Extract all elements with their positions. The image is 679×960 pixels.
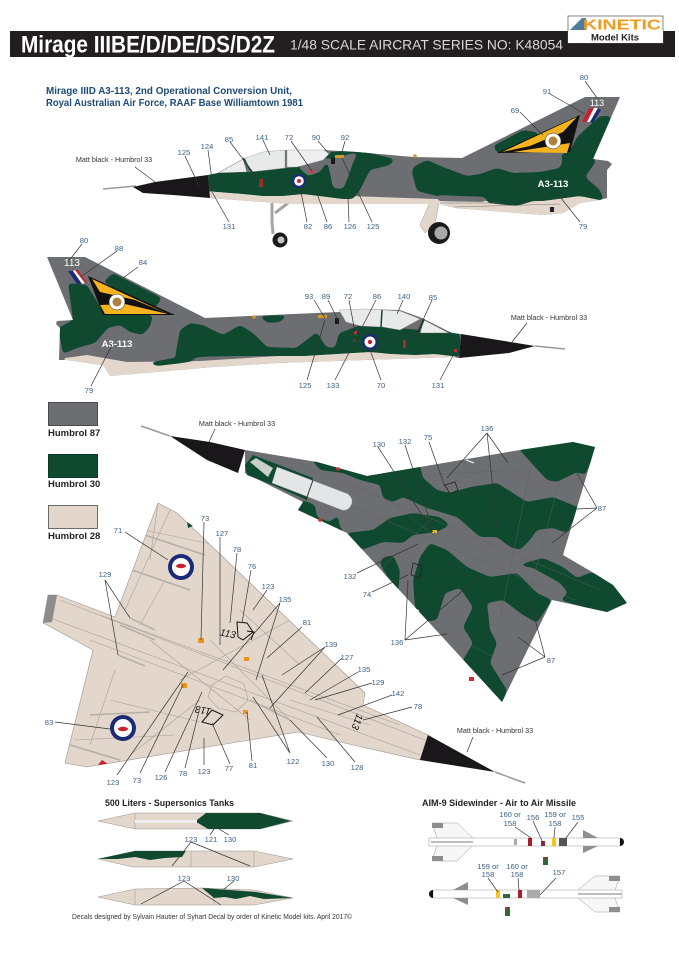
callouts: underside view: 123	[262, 582, 274, 591]
fin flash badge	[88, 276, 175, 315]
callouts: side profile 1: 86	[324, 222, 332, 231]
black nose	[420, 735, 495, 772]
nose gear	[272, 203, 288, 248]
callouts: underside view: 139	[325, 640, 337, 649]
callouts: side profile 2: 72	[344, 292, 352, 301]
callouts: side profile 2: 125	[299, 381, 311, 390]
missile 2 callouts: 158	[511, 870, 523, 879]
roundel	[292, 174, 306, 188]
tail flag	[582, 108, 601, 123]
callouts: side profile 2: 93	[305, 292, 313, 301]
callouts: underside view: 78	[233, 545, 241, 554]
logo: Kinetic Model Kits: Model Kits	[591, 32, 639, 44]
black nose	[170, 436, 245, 473]
callouts: underside view: 135	[279, 595, 291, 604]
logo: Kinetic Model Kits	[568, 16, 663, 44]
aircraft: underside view	[43, 503, 525, 783]
tank callouts: 130	[227, 874, 239, 883]
markings	[538, 98, 604, 190]
missile 1 callouts	[499, 810, 584, 843]
gray base	[208, 97, 620, 215]
black nose	[133, 175, 210, 198]
aircraft: left side profile	[103, 97, 620, 248]
decal details	[318, 467, 474, 681]
green camouflage	[205, 116, 612, 206]
markings: 113	[64, 258, 80, 269]
gear doors	[202, 622, 254, 725]
callouts: side profile 1: 124	[201, 142, 213, 151]
green camouflage	[58, 273, 460, 366]
exhaust	[43, 595, 57, 623]
swatch: Humbrol 28	[48, 506, 100, 542]
callouts: top view: 132	[344, 572, 356, 581]
callouts: underside view: 71	[114, 526, 122, 535]
icon: main wheel	[428, 222, 450, 244]
callouts: underside view: 126	[155, 773, 167, 782]
serial marks: 113	[194, 703, 212, 716]
callouts: top view: 130	[373, 440, 385, 449]
callouts: side profile 1: 125	[178, 148, 190, 157]
callouts: underside view: Matt black - Humbrol 33	[457, 726, 533, 735]
black nose	[459, 334, 535, 358]
tank pylon marks	[187, 522, 193, 528]
swatch: Humbrol 87	[48, 402, 100, 439]
main gear strut	[420, 202, 439, 233]
missile 1 callouts: 158	[549, 819, 561, 828]
callouts: side profile 2: 85	[429, 293, 437, 302]
tank callouts: 123	[178, 874, 190, 883]
callouts: underside view: 130	[322, 759, 334, 768]
heading: missiles: AIM-9 Sidewinder - Air to Air Missile	[422, 798, 576, 809]
markings: A3-113	[102, 339, 132, 350]
tank callouts	[141, 829, 250, 905]
subtitle: 1/48 SCALE AIRCRAT SERIES NO: K48054	[290, 36, 563, 52]
roundel: lower	[110, 715, 136, 741]
callouts: side profile 2: 140	[398, 292, 410, 301]
tank 2	[98, 849, 293, 867]
heading: tanks: 500 Liters - Supersonics Tanks	[105, 798, 234, 809]
scheme heading: Royal Australian Air Force, RAAF Base Williamtown 1981	[46, 98, 303, 109]
small decals	[252, 315, 457, 352]
markings: A3-113	[538, 179, 568, 190]
missile 2	[429, 876, 622, 916]
callouts: top view	[199, 419, 606, 675]
canopy	[339, 309, 449, 335]
decal spots	[181, 638, 249, 714]
callouts: side profile 1: 131	[223, 222, 235, 231]
callouts: side profile 1: 82	[304, 222, 312, 231]
swatch: Humbrol 28: Humbrol 28	[48, 531, 100, 542]
missile 1 callouts: 156	[527, 813, 539, 822]
missile 2 callouts: 158	[482, 870, 494, 879]
tank callouts: 130	[224, 835, 236, 844]
callouts: underside view: 83	[45, 718, 53, 727]
small decals	[259, 154, 560, 212]
panel lines	[50, 503, 425, 755]
serial marks	[194, 627, 364, 731]
callouts: underside view: 73	[133, 776, 141, 785]
callouts: side profile 2: Matt black - Humbrol 33	[511, 313, 587, 322]
callouts: top view: 136	[391, 638, 403, 647]
callouts: underside view: 135	[358, 665, 370, 674]
missile 1 callouts: 155	[572, 813, 584, 822]
callouts: underside view: 122	[287, 757, 299, 766]
callouts: side profile 1	[76, 73, 597, 231]
callouts: underside view: 77	[225, 764, 233, 773]
callouts: side profile 1: 141	[256, 133, 268, 142]
tank callouts: 121	[205, 835, 217, 844]
callouts: side profile 2: 86	[373, 292, 381, 301]
callouts: side profile 2: 80	[80, 236, 88, 245]
swatch: Humbrol 30	[48, 454, 100, 490]
canopy	[218, 150, 330, 173]
callouts: underside view: 127	[341, 653, 353, 662]
fin flash badge	[497, 115, 580, 153]
callouts: top view: 136	[481, 424, 493, 433]
missile 1 callouts: 158	[504, 819, 516, 828]
aircraft: right side profile	[47, 257, 565, 380]
callouts: side profile 1: 69	[511, 106, 519, 115]
green camouflage	[295, 440, 628, 705]
title bar	[10, 31, 675, 58]
callouts: side profile 1: 126	[344, 222, 356, 231]
callouts: side profile 2	[68, 236, 587, 395]
beige underside	[64, 352, 456, 376]
callouts: underside view: 142	[392, 689, 404, 698]
callouts: underside view: 78	[179, 769, 187, 778]
tank 3	[98, 888, 293, 905]
callouts: top view: 87	[547, 656, 555, 665]
tail flag	[68, 270, 87, 284]
callouts: side profile 2: 84	[139, 258, 147, 267]
swatch: Humbrol 30: Humbrol 30	[48, 479, 100, 490]
beige base	[43, 503, 428, 767]
callouts: underside view: 127	[216, 529, 228, 538]
red wing decal	[98, 760, 108, 765]
gray base	[245, 442, 627, 702]
aircraft: top view	[141, 426, 628, 705]
missile 1	[429, 823, 624, 865]
markings	[64, 258, 132, 350]
callouts: underside view: 129	[99, 570, 111, 579]
callouts: underside view: 129	[372, 678, 384, 687]
callouts: underside view	[45, 514, 533, 787]
missile 2 callouts	[477, 862, 565, 895]
title: Mirage IIIBE/D/DE/DS/D2Z	[21, 32, 275, 58]
roundel	[362, 334, 378, 350]
callouts: side profile 2: 131	[432, 381, 444, 390]
callouts: side profile 1: 92	[341, 133, 349, 142]
callouts: side profile 2: 89	[322, 292, 330, 301]
callouts: side profile 1: 80	[580, 73, 588, 82]
callouts: side profile 1: 85	[225, 135, 233, 144]
callouts: underside view: 78	[414, 702, 422, 711]
missile 2 callouts: 159 or	[477, 862, 499, 871]
scheme heading: Mirage IIID A3-113, 2nd Operational Conversion Unit,	[46, 86, 292, 97]
callouts: underside view: 73	[201, 514, 209, 523]
callouts: side profile 1: 125	[367, 222, 379, 231]
missile 1 callouts: 159 or	[544, 810, 566, 819]
canopy frame and glass	[245, 455, 352, 510]
missile 1 callouts: 160 or	[499, 810, 521, 819]
callouts: underside view: 123	[107, 778, 119, 787]
callouts: side profile 1: Matt black - Humbrol 33	[76, 155, 152, 164]
callouts: top view: 74	[363, 590, 371, 599]
logo: Kinetic Model Kits: KINETIC	[583, 16, 661, 34]
callouts: top view: 132	[399, 437, 411, 446]
scheme heading	[46, 86, 303, 109]
panel lines	[325, 470, 600, 660]
tank callouts: 123	[185, 835, 197, 844]
markings: 113	[590, 98, 604, 108]
swatch: Humbrol 87: Humbrol 87	[48, 428, 100, 439]
missile 2 callouts: 157	[553, 868, 565, 877]
callouts: top view: 75	[424, 433, 432, 442]
callouts: side profile 1: 79	[579, 222, 587, 231]
callouts: side profile 1: 90	[312, 133, 320, 142]
callouts: side profile 2: 133	[327, 381, 339, 390]
white wing marks	[413, 460, 474, 611]
credit text: Decals designed by Sylvain Hautier of Syhart Decal by order of Kinetic Model kits. April 2017©	[72, 912, 352, 921]
beige underside	[209, 188, 603, 215]
callouts: top view: 87	[598, 504, 606, 513]
callouts: top view: Matt black - Humbrol 33	[199, 419, 275, 428]
callouts: side profile 2: 79	[85, 386, 93, 395]
tank 1	[98, 813, 293, 829]
serial marks: 113	[349, 712, 364, 731]
serial marks: 113	[219, 627, 237, 642]
callouts: underside view: 81	[303, 618, 311, 627]
callouts: side profile 2: 70	[377, 381, 385, 390]
callouts: side profile 2: 88	[115, 244, 123, 253]
gray base	[47, 257, 461, 376]
callouts: side profile 1: 72	[285, 133, 293, 142]
callouts: underside view: 123	[198, 767, 210, 776]
callouts: underside view: 128	[351, 763, 363, 772]
roundel: upper	[168, 554, 194, 580]
missile 2 callouts: 160 or	[506, 862, 528, 871]
gray patches in camouflage	[297, 152, 612, 202]
callouts: side profile 1: 91	[543, 87, 551, 96]
callouts: underside view: 76	[248, 562, 256, 571]
callouts: underside view: 81	[249, 761, 257, 770]
